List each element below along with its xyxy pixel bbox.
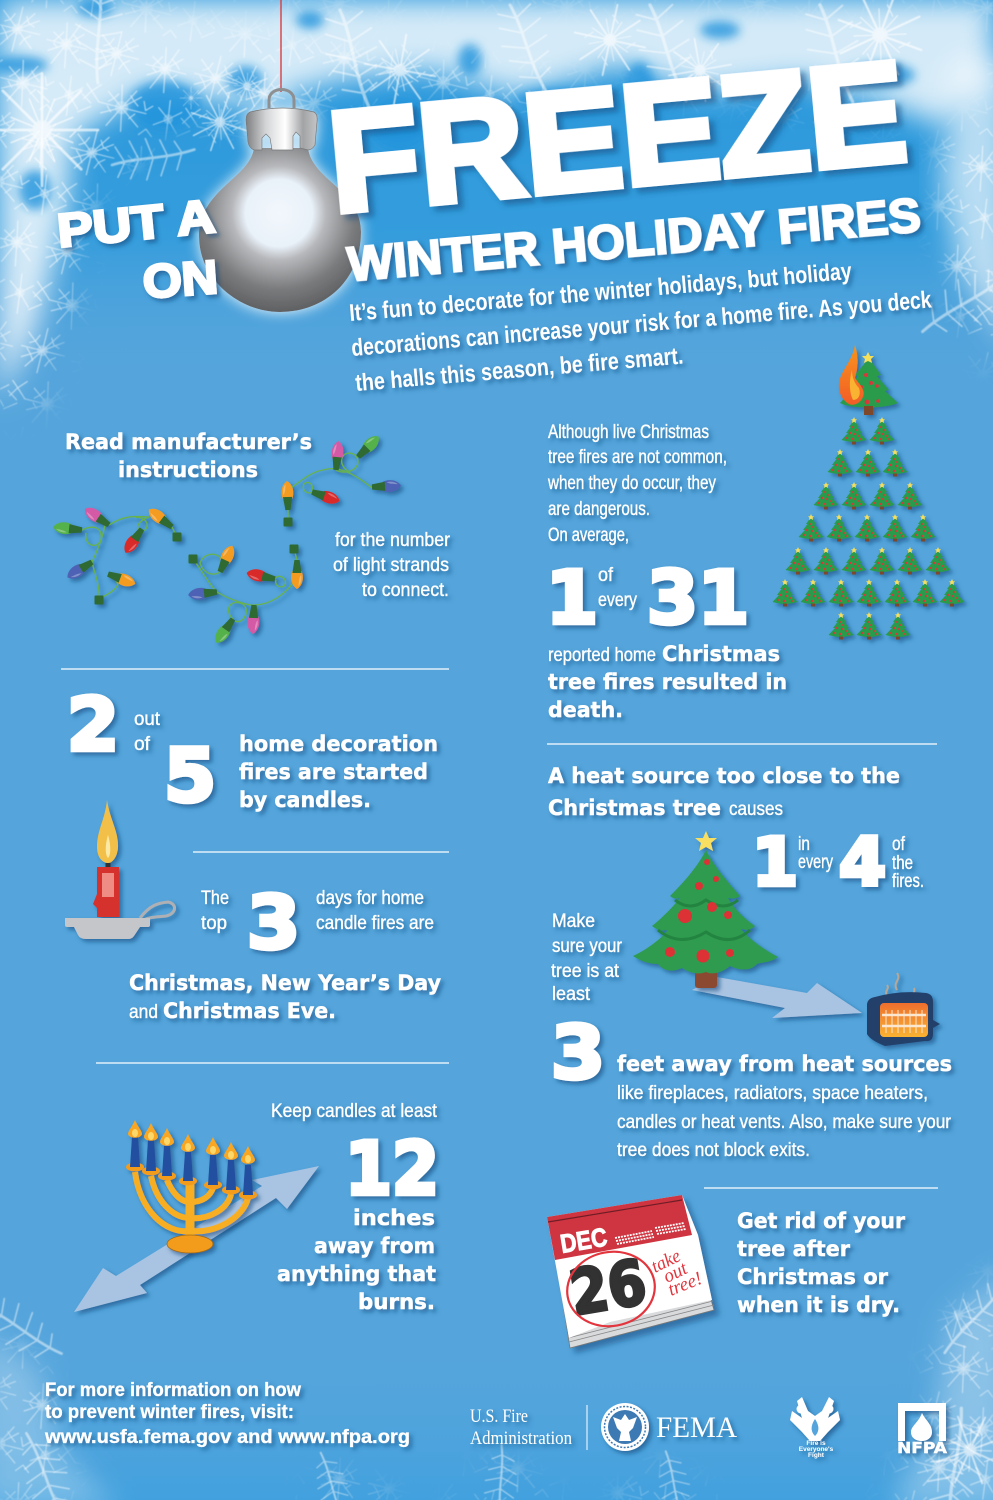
text: get rid of your tree bbox=[737, 1209, 906, 1317]
stat: top 3 days bbox=[201, 881, 434, 966]
footer text: www.usfa.fema.gov and www.nfpa.org bbox=[44, 1427, 410, 1448]
arrow: double arrow bbox=[74, 1166, 319, 1312]
ornament loop bbox=[269, 90, 294, 108]
heading: a heat source too close: A heat source too close to the bbox=[548, 764, 900, 788]
title: put a on: PUT A bbox=[55, 189, 217, 257]
logo: fema: FEMA bbox=[656, 1411, 737, 1444]
ornament string bbox=[280, 0, 282, 92]
logo: fire is everyone's fight: Everyone's bbox=[799, 1446, 834, 1453]
icon: rows of small trees bbox=[772, 417, 964, 640]
icon: calendar: out bbox=[660, 1258, 691, 1287]
text: although live christmas tree fires: when they do occur, they bbox=[547, 472, 716, 494]
text: 3 feet away from heat sources: candles or heat vents. Also, make sure your bbox=[617, 1111, 951, 1133]
intro text: It’s fun to decorate for the winter holidays, but holiday bbox=[348, 258, 853, 327]
footer text bbox=[44, 1380, 410, 1448]
stat: 1 in every 4 of the fires: 1 bbox=[752, 824, 798, 901]
heading: read manufacturer's instructions: Read manufacturer’s bbox=[65, 430, 312, 454]
text: get rid of your tree: Get rid of your bbox=[737, 1209, 906, 1233]
stat: 1 in every 4 of the fires: in bbox=[798, 833, 810, 855]
stat: 2 out of 5: out bbox=[134, 708, 161, 730]
text: reported home christmas tree fires: reported home bbox=[548, 644, 656, 666]
icon: calendar: take bbox=[648, 1245, 684, 1277]
icon: large burning tree bbox=[839, 345, 898, 415]
text: for the number of light strands: for the number bbox=[335, 529, 450, 551]
text: keep candles 12 inches bbox=[271, 1100, 439, 1314]
panel: christmas tree deaths bbox=[546, 345, 964, 722]
text: make sure your tree: least bbox=[552, 983, 591, 1005]
panel: get rid of tree bbox=[547, 1195, 906, 1348]
logo: fema bbox=[601, 1403, 737, 1451]
ornament ball bbox=[199, 148, 361, 312]
logo: us fire administration bbox=[470, 1406, 572, 1449]
text: for the number of light strands: of light strands bbox=[333, 554, 449, 576]
icon: menorah bbox=[126, 1120, 257, 1253]
text: 3 feet away from heat sources: tree does not block exits. bbox=[617, 1139, 810, 1161]
stat: top 3 days: 3 bbox=[247, 881, 300, 966]
text: keep candles 12 inches: 12 bbox=[345, 1127, 439, 1212]
heading: a heat source too close: Christmas tree bbox=[548, 796, 721, 820]
heading: a heat source too close bbox=[548, 764, 900, 820]
text: home decoration fires bbox=[239, 732, 438, 812]
icon: space heater bbox=[867, 973, 940, 1046]
panel: candles stat bbox=[67, 683, 438, 819]
intro text: the halls this season, be fire smart. bbox=[354, 343, 684, 397]
text: although live christmas tree fires: are dangerous. bbox=[548, 498, 650, 520]
stat: 2 out of 5 bbox=[67, 683, 216, 819]
intro text bbox=[348, 258, 933, 397]
heading: read manufacturer's instructions bbox=[65, 430, 312, 482]
text: christmas new year's day: Christmas, New Year’s Day bbox=[129, 971, 441, 995]
icon: burning tree and pyramid of 31 trees bbox=[772, 345, 964, 640]
title: put a on: ON bbox=[141, 250, 220, 308]
stat: 1 in every 4 of the fires bbox=[752, 824, 924, 901]
logo: nfpa: NFPA bbox=[897, 1439, 947, 1457]
stat: top 3 days: The bbox=[201, 887, 229, 909]
text: keep candles 12 inches: Keep candles at least bbox=[271, 1100, 438, 1122]
text: 3 feet away from heat sources: feet away from heat sources bbox=[617, 1052, 952, 1076]
text: although live christmas tree fires: On average, bbox=[548, 524, 629, 546]
text: make sure your tree bbox=[551, 910, 622, 1005]
icon: candle bbox=[65, 800, 175, 939]
title: put a on bbox=[55, 189, 220, 308]
panel: light strands bbox=[53, 430, 450, 646]
text: although live christmas tree fires: Although live Christmas bbox=[548, 421, 709, 443]
text: keep candles 12 inches: burns. bbox=[358, 1290, 435, 1314]
text: christmas new year's day: and bbox=[129, 1001, 158, 1023]
stat: top 3 days: top bbox=[201, 912, 227, 934]
heading: a heat source too close: causes bbox=[729, 798, 783, 820]
logo: nfpa bbox=[897, 1403, 947, 1457]
stat: top 3 days: candle fires are bbox=[316, 912, 434, 934]
text: make sure your tree: Make bbox=[552, 910, 595, 932]
text: 3 feet away from heat sources bbox=[551, 1011, 952, 1161]
stat: 2 out of 5: 5 bbox=[164, 734, 216, 819]
text: christmas new year's day bbox=[129, 971, 441, 1023]
text: 3 feet away from heat sources: like fireplaces, radiators, space heaters, bbox=[617, 1082, 928, 1104]
text: although live christmas tree fires bbox=[547, 421, 727, 546]
logo: fire is everyone's fight bbox=[790, 1397, 840, 1459]
stat: top 3 days: days for home bbox=[316, 887, 424, 909]
logo: us fire administration: Administration bbox=[470, 1428, 572, 1449]
stat: 1 of every 31: 1 bbox=[546, 556, 598, 641]
ornament cap bbox=[246, 108, 317, 150]
icon: calendar: 26 bbox=[564, 1245, 651, 1330]
stat: 1 in every 4 of the fires: 4 bbox=[839, 824, 886, 901]
title: freeze: FREEZE bbox=[322, 32, 912, 243]
text: home decoration fires: home decoration bbox=[239, 732, 438, 756]
stat: 1 in every 4 of the fires: fires. bbox=[892, 870, 924, 892]
icon: christmas tree bbox=[633, 831, 778, 988]
text: for the number of light strands bbox=[333, 529, 450, 601]
icon: calendar: tree! bbox=[665, 1268, 705, 1301]
text: get rid of your tree: Christmas or bbox=[737, 1265, 889, 1289]
panel: menorah bbox=[74, 1100, 439, 1314]
text: for the number of light strands: to connect. bbox=[362, 579, 449, 601]
text: home decoration fires: fires are started bbox=[239, 760, 428, 784]
logo: fire is everyone's fight: Fight bbox=[808, 1452, 825, 1459]
panel: heat source bbox=[548, 764, 952, 1161]
stat: 1 of every 31: of bbox=[598, 564, 614, 586]
logo: us fire administration: U.S. Fire bbox=[470, 1406, 528, 1427]
text: christmas new year's day: Christmas Eve. bbox=[163, 999, 336, 1023]
text: reported home christmas tree fires: Christmas bbox=[662, 642, 780, 666]
footer text: to prevent winter fires, visit: bbox=[45, 1402, 294, 1423]
text: get rid of your tree: tree after bbox=[737, 1237, 851, 1261]
stat: 2 out of 5: 2 bbox=[67, 683, 119, 768]
text: 3 feet away from heat sources: 3 bbox=[551, 1011, 605, 1096]
ornament bbox=[199, 0, 361, 312]
icon: string lights bbox=[53, 432, 401, 646]
stat: 1 of every 31: every bbox=[598, 589, 637, 611]
text: make sure your tree: sure your bbox=[552, 935, 622, 957]
stat: 1 of every 31: 31 bbox=[647, 556, 749, 641]
text: reported home christmas tree fires: death. bbox=[548, 698, 623, 722]
text: keep candles 12 inches: inches bbox=[353, 1206, 435, 1230]
text: home decoration fires: by candles. bbox=[239, 788, 371, 812]
text: make sure your tree: tree is at bbox=[551, 960, 620, 982]
stat: 1 in every 4 of the fires: of bbox=[892, 833, 905, 855]
text: keep candles 12 inches: away from bbox=[314, 1234, 435, 1258]
stat: 1 of every 31 bbox=[546, 556, 749, 641]
stat: 2 out of 5: of bbox=[134, 733, 151, 755]
footer text: For more information on how bbox=[45, 1380, 301, 1401]
title: winter holiday fires: WINTER HOLIDAY FIRES bbox=[345, 189, 923, 292]
text: keep candles 12 inches: anything that bbox=[277, 1262, 436, 1286]
stat: 1 in every 4 of the fires: the bbox=[892, 852, 913, 874]
stat: 1 in every 4 of the fires: every bbox=[798, 851, 833, 873]
icon: calendar bbox=[547, 1195, 714, 1348]
logo: fire is everyone's fight: Fire is bbox=[806, 1440, 826, 1447]
arrow: tree to heater bbox=[692, 977, 862, 1018]
text: reported home christmas tree fires bbox=[548, 642, 787, 722]
heading: read manufacturer's instructions: instructions bbox=[118, 458, 258, 482]
text: although live christmas tree fires: tree fires are not common, bbox=[548, 446, 727, 468]
text: reported home christmas tree fires: tree fires resulted in bbox=[548, 670, 787, 694]
icon: calendar: DEC bbox=[558, 1222, 610, 1259]
text: get rid of your tree: when it is dry. bbox=[737, 1293, 900, 1317]
